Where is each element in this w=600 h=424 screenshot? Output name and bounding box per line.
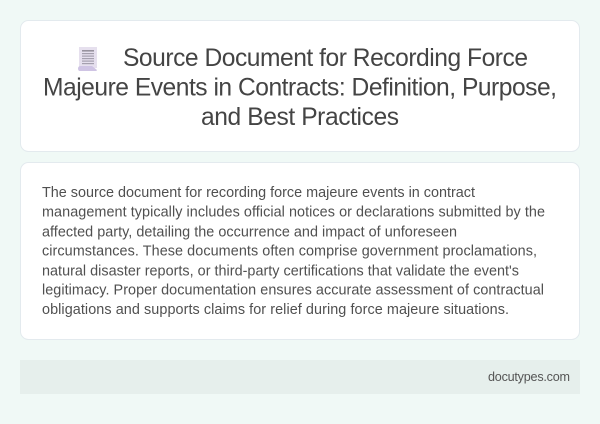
text block: description: affected party, detailing the occurrence and impact of unforeseen xyxy=(42,224,457,240)
footer text: source site: docutypes.com xyxy=(488,370,570,384)
text block: description: circumstances. These documents often comprise government proclamations, xyxy=(42,244,537,260)
panel: description card xyxy=(20,162,580,340)
footer bar xyxy=(20,360,580,394)
panel: title card xyxy=(20,20,580,152)
icon: document scroll xyxy=(78,47,97,71)
title xyxy=(43,45,557,131)
title: Source Document for Recording Force xyxy=(123,45,528,72)
title: Majeure Events in Contracts: Definition, Purpose, xyxy=(43,74,557,102)
text block: description: legitimacy. Proper documentation ensures accurate assessment of contractual xyxy=(42,282,544,298)
text block: description: obligations and supports claims for relief during force majeure situations. xyxy=(42,302,509,318)
text block: description xyxy=(42,185,545,318)
text block: description: management typically includes official notices or declarations submitted by the xyxy=(42,204,545,220)
text block: description: The source document for recording force majeure events in contract xyxy=(42,185,475,201)
title: and Best Practices xyxy=(201,104,399,131)
text block: description: natural disaster reports, or third-party certifications that validate the event's xyxy=(42,264,519,280)
